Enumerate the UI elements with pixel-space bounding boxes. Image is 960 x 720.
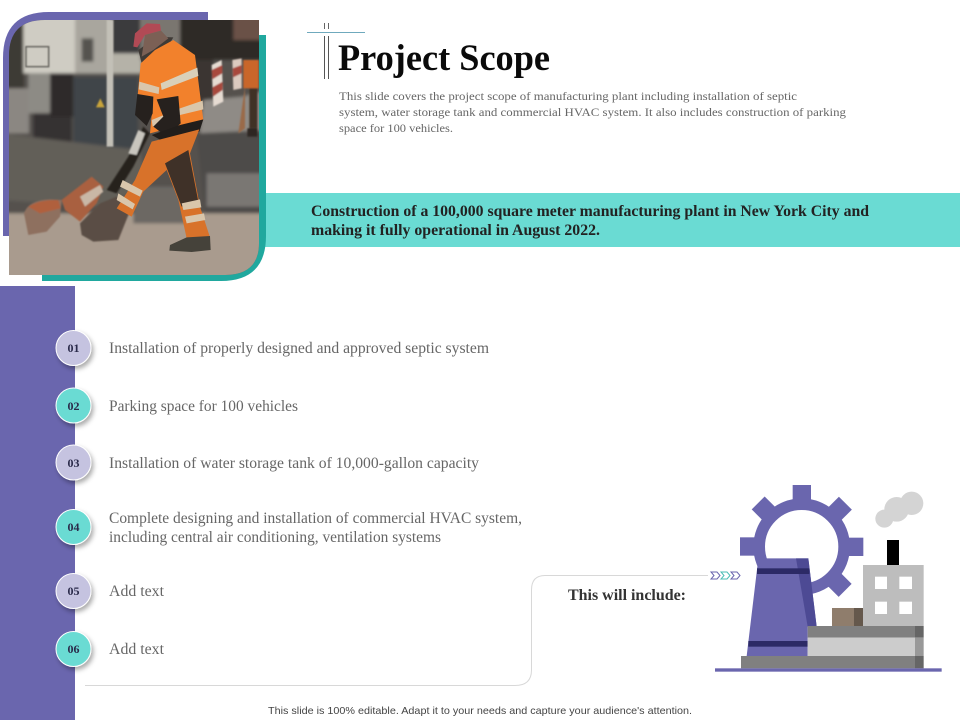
list item 04: Complete designing and installation of commercial HVAC system, [109,510,522,527]
list item 04: including central air conditioning, ventilation systems [109,529,441,546]
factory base [715,626,942,672]
list item 05: 05 [68,584,80,598]
list item 06: 06 [68,642,80,656]
photo frame: purple corner [3,12,208,236]
list item 02 [56,388,298,423]
photo base [9,20,259,275]
list item 03 [56,445,479,480]
chimney [887,540,899,565]
icon: factory with gear [715,485,942,672]
icon: triple chevrons [711,572,740,579]
list item 04: 04 [68,520,80,534]
list item 03: Installation of water storage tank of 10,000-gallon capacity [109,455,479,472]
photo background [9,20,259,275]
photo: road worker cutting pavement [9,20,259,275]
list item 02: 02 [68,399,80,413]
footer note: This slide is 100% editable. Adapt it to your needs and capture your audience's attention. [268,705,692,717]
list item 01: Installation of properly designed and approved septic system [109,340,489,357]
saw machine [24,127,150,242]
list item 02: Parking space for 100 vehicles [109,398,298,415]
list item 01: 01 [68,341,80,355]
gear [740,485,863,597]
crate [832,608,863,626]
description text: space for 100 vehicles. [339,121,453,135]
office building [863,565,924,626]
heading: Project Scope [338,38,550,79]
connector line: include bracket [85,576,708,686]
photo details [26,20,259,147]
banner: project goal [260,193,960,247]
description text [339,89,846,135]
smoke cloud [875,492,923,528]
label: this will include: This will include: [568,587,686,604]
list item 05: Add text [109,583,165,600]
list item 06 [56,632,165,666]
list item 01 [56,330,489,366]
list item 05 [56,574,165,608]
list item 06: Add text [109,641,165,658]
banner: project goal: Construction of a 100,000 square meter manufacturing plant in New York City and [311,203,869,220]
sidebar: purple strip [0,286,75,720]
banner: project goal: making it fully operational in August 2022. [311,222,600,239]
list item 04 [56,510,522,546]
title ornament [307,23,365,79]
cooling tower [747,558,817,656]
worker [117,23,211,252]
description text: This slide covers the project scope of manufacturing plant including installation of septic [339,89,797,103]
title block [307,23,550,79]
photo frame: teal corner [42,35,266,281]
description text: system, water storage tank and commercial HVAC system. It also includes construction of parking [339,105,846,119]
list item 03: 03 [68,456,80,470]
